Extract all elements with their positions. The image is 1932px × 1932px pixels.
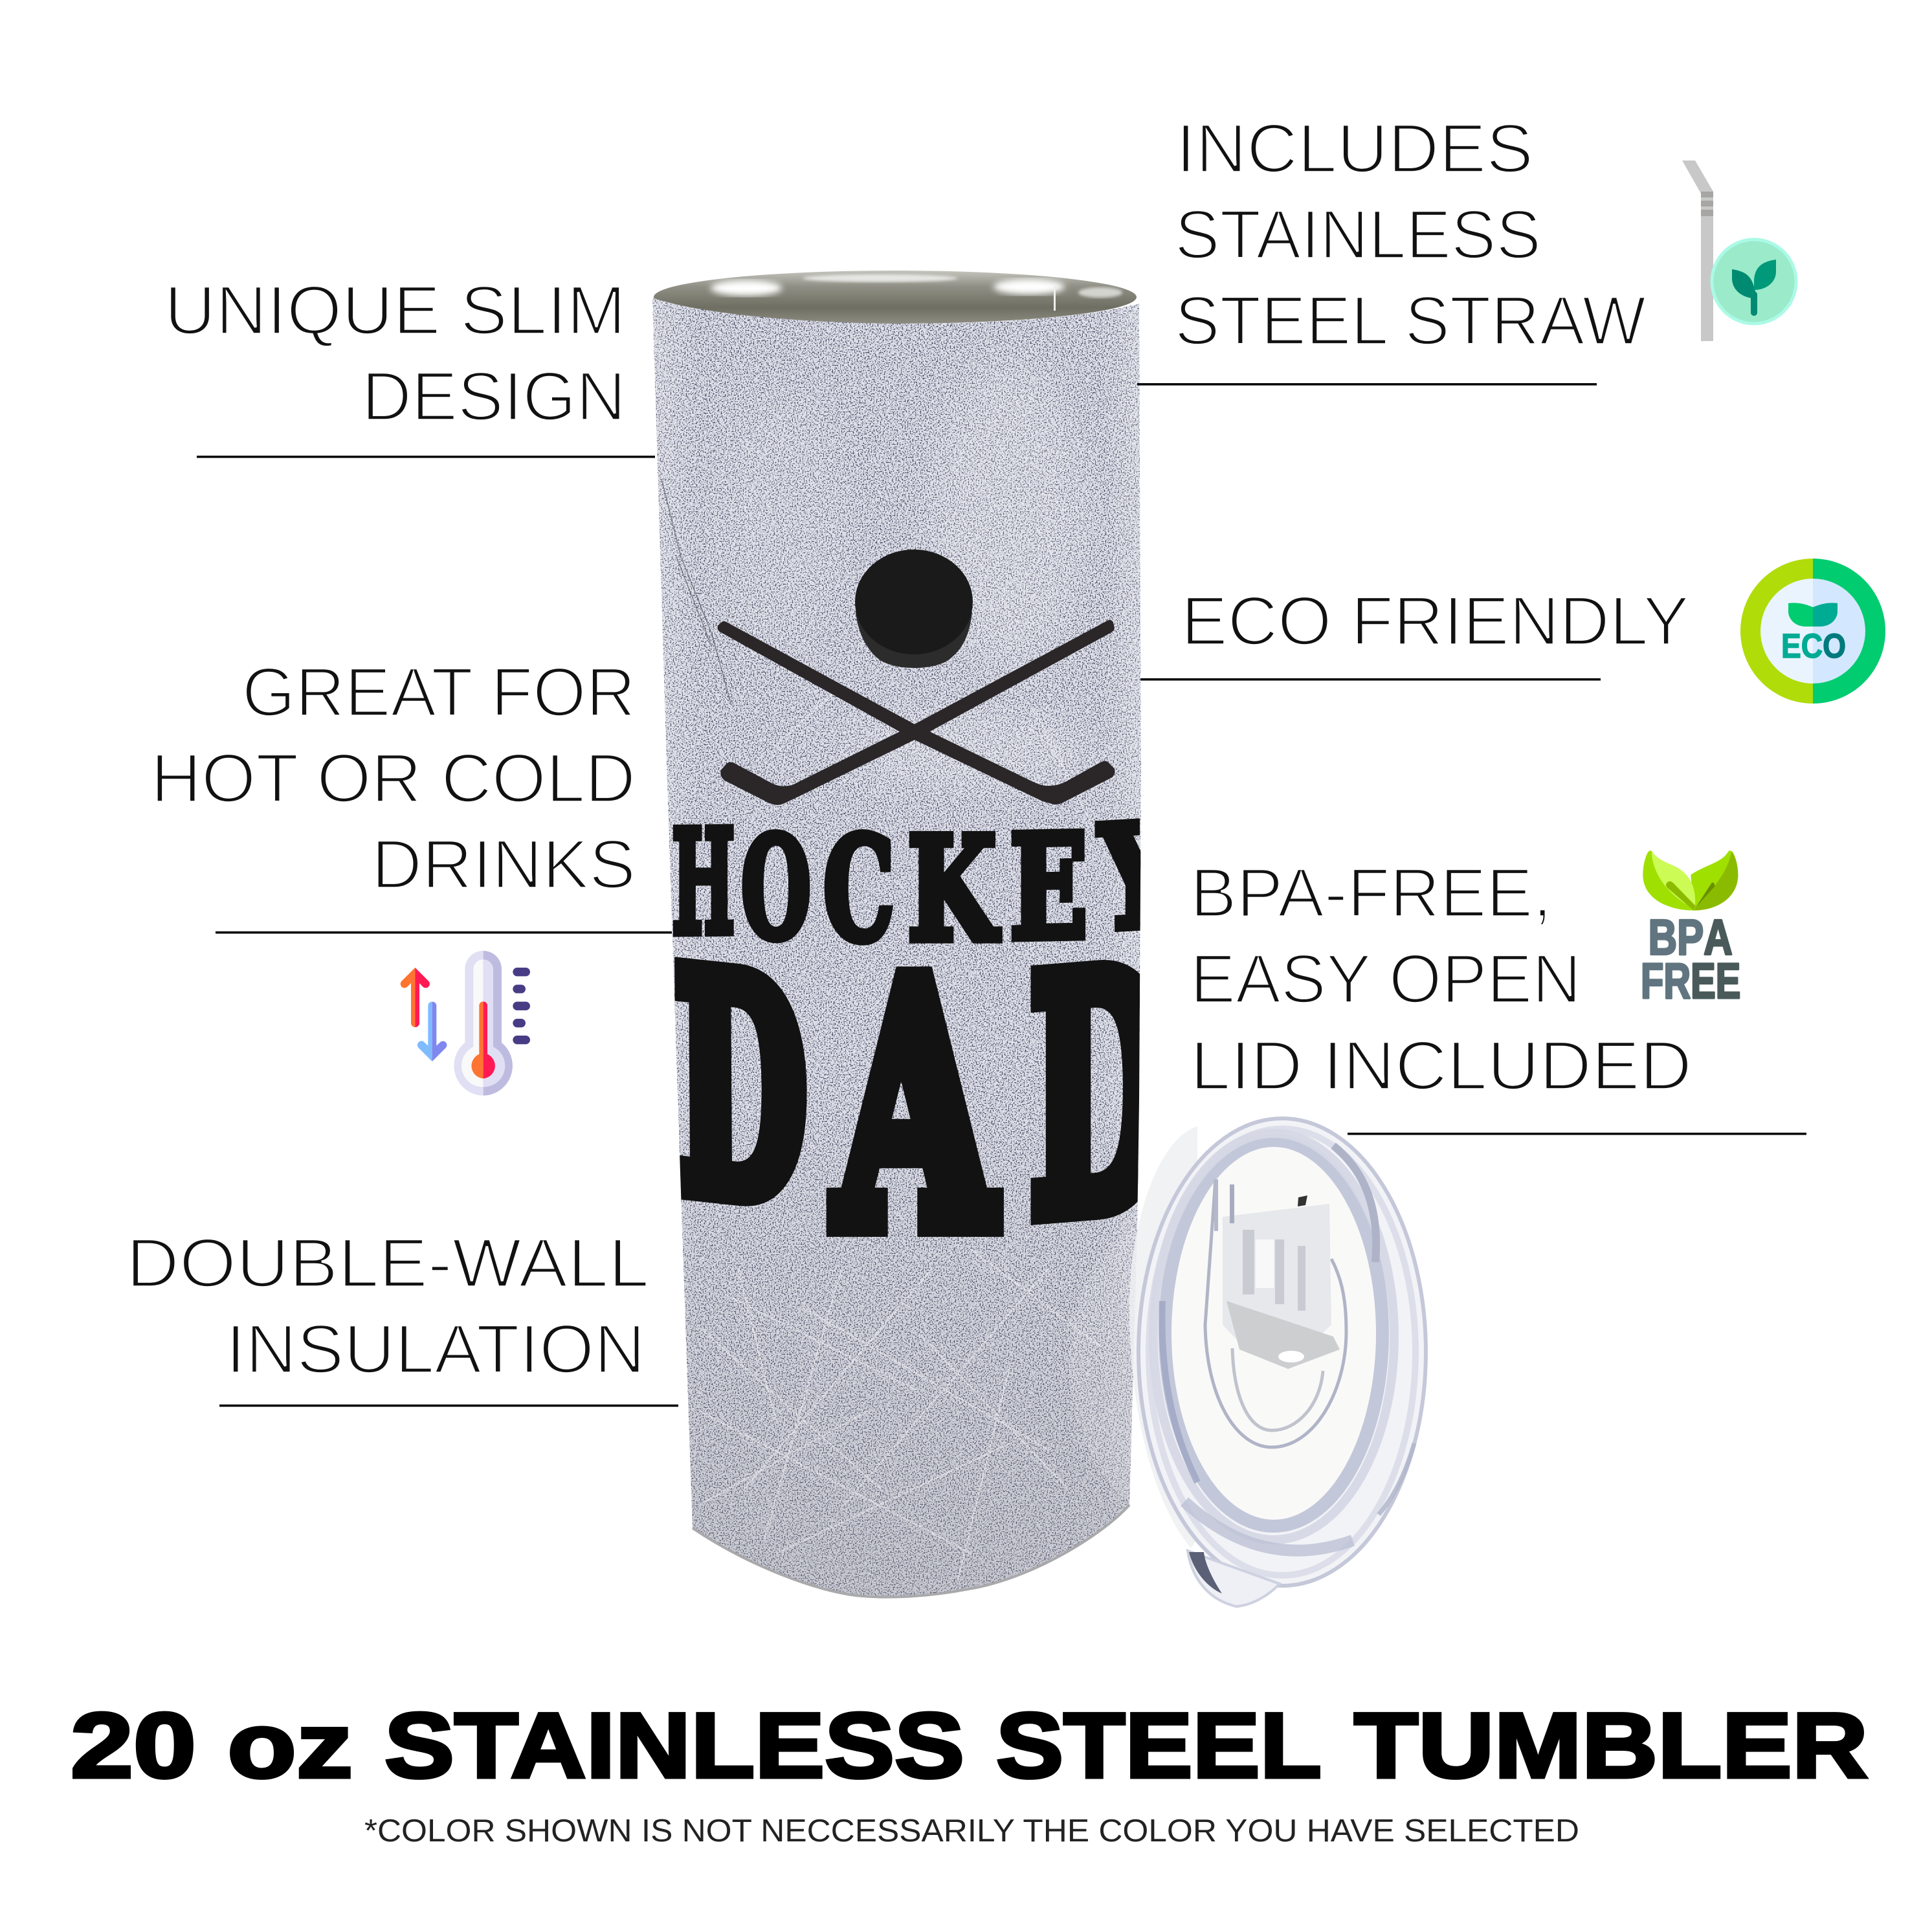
- HOCKEY lettering: O: [741, 806, 811, 971]
- callout: includes stainless steel straw: STEEL STRAW: [1175, 282, 1646, 359]
- HOCKEY lettering: C: [823, 806, 894, 973]
- callout: great for hot or cold drinks: GREAT FOR: [242, 653, 636, 731]
- icon: eco badge: [1740, 559, 1885, 704]
- callout: includes stainless steel straw: STAINLESS: [1175, 195, 1541, 273]
- tumbler: [647, 271, 1179, 1605]
- callout: unique slim design: DESIGN: [362, 357, 626, 435]
- icon: BPA free: [1641, 850, 1740, 1009]
- callout: unique slim design: UNIQUE SLIM: [164, 271, 626, 349]
- lid inner opening: [1165, 1140, 1382, 1526]
- callout: eco friendly: ECO FRIENDLY: [1181, 582, 1689, 660]
- icon: BPA free: BPA: [1649, 910, 1733, 966]
- title: STEEL: [996, 1694, 1322, 1797]
- callout: double-wall insulation: INSULATION: [226, 1310, 645, 1388]
- HOCKEY lettering: Y: [1098, 791, 1179, 963]
- tumbler base edge: [693, 1505, 1129, 1597]
- callout: includes stainless steel straw: [1137, 109, 1646, 386]
- lid pull tab: [1188, 1551, 1280, 1606]
- callout: great for hot or cold drinks: DRINKS: [372, 825, 636, 903]
- HOCKEY lettering: H: [672, 799, 735, 967]
- callout: great for hot or cold drinks: [151, 653, 672, 933]
- hockey puck: [855, 550, 973, 668]
- tumbler rim and metal interior: [654, 271, 1137, 324]
- icon: straw with sprout: [1682, 161, 1796, 341]
- icon: eco badge: ECO: [1781, 627, 1846, 665]
- callout: great for hot or cold drinks: HOT OR COLD: [151, 739, 636, 817]
- callout: unique slim design: [164, 271, 655, 458]
- lid U channel: [1205, 1179, 1346, 1447]
- lid outer disc: [1138, 1118, 1426, 1586]
- DAD lettering: D: [674, 908, 808, 1270]
- callout: BPA-free easy open lid: EASY OPEN: [1190, 940, 1581, 1017]
- title: STAINLESS: [384, 1694, 964, 1797]
- lid reflection on body: [1069, 1228, 1137, 1500]
- hockey sticks: [718, 621, 1115, 805]
- callout: includes stainless steel straw: INCLUDES: [1176, 109, 1533, 187]
- HOCKEY lettering: E: [1010, 803, 1087, 972]
- HOCKEY lettering: K: [907, 806, 1000, 973]
- tumbler body with ice texture: [647, 291, 1152, 1605]
- HOCKEY lettering: [673, 818, 1140, 946]
- lid translucent back wall: [1129, 1126, 1230, 1548]
- callout: BPA-free easy open lid: BPA-FREE,: [1190, 854, 1552, 931]
- DAD lettering: [674, 957, 1140, 1237]
- lid: [1129, 1118, 1426, 1606]
- callout: BPA-free easy open lid: [1190, 854, 1806, 1135]
- title: TUMBLER: [1354, 1694, 1868, 1797]
- icon: BPA free: FREE: [1641, 953, 1740, 1009]
- callout: double-wall insulation: [126, 1224, 678, 1407]
- icon: thermometer: [401, 951, 530, 1096]
- DAD lettering: D: [1030, 902, 1171, 1286]
- title: 20 oz: [71, 1694, 353, 1797]
- title: [71, 1694, 1868, 1797]
- DAD lettering: A: [834, 912, 997, 1300]
- callout: BPA-free easy open lid: LID INCLUDED: [1190, 1027, 1692, 1104]
- disclaimer text: *COLOR SHOWN IS NOT NECCESSARILY THE COLOR YOU HAVE SELECTED: [364, 1814, 1579, 1849]
- callout: double-wall insulation: DOUBLE-WALL: [126, 1224, 649, 1302]
- lid slider mechanism: [1214, 1179, 1340, 1369]
